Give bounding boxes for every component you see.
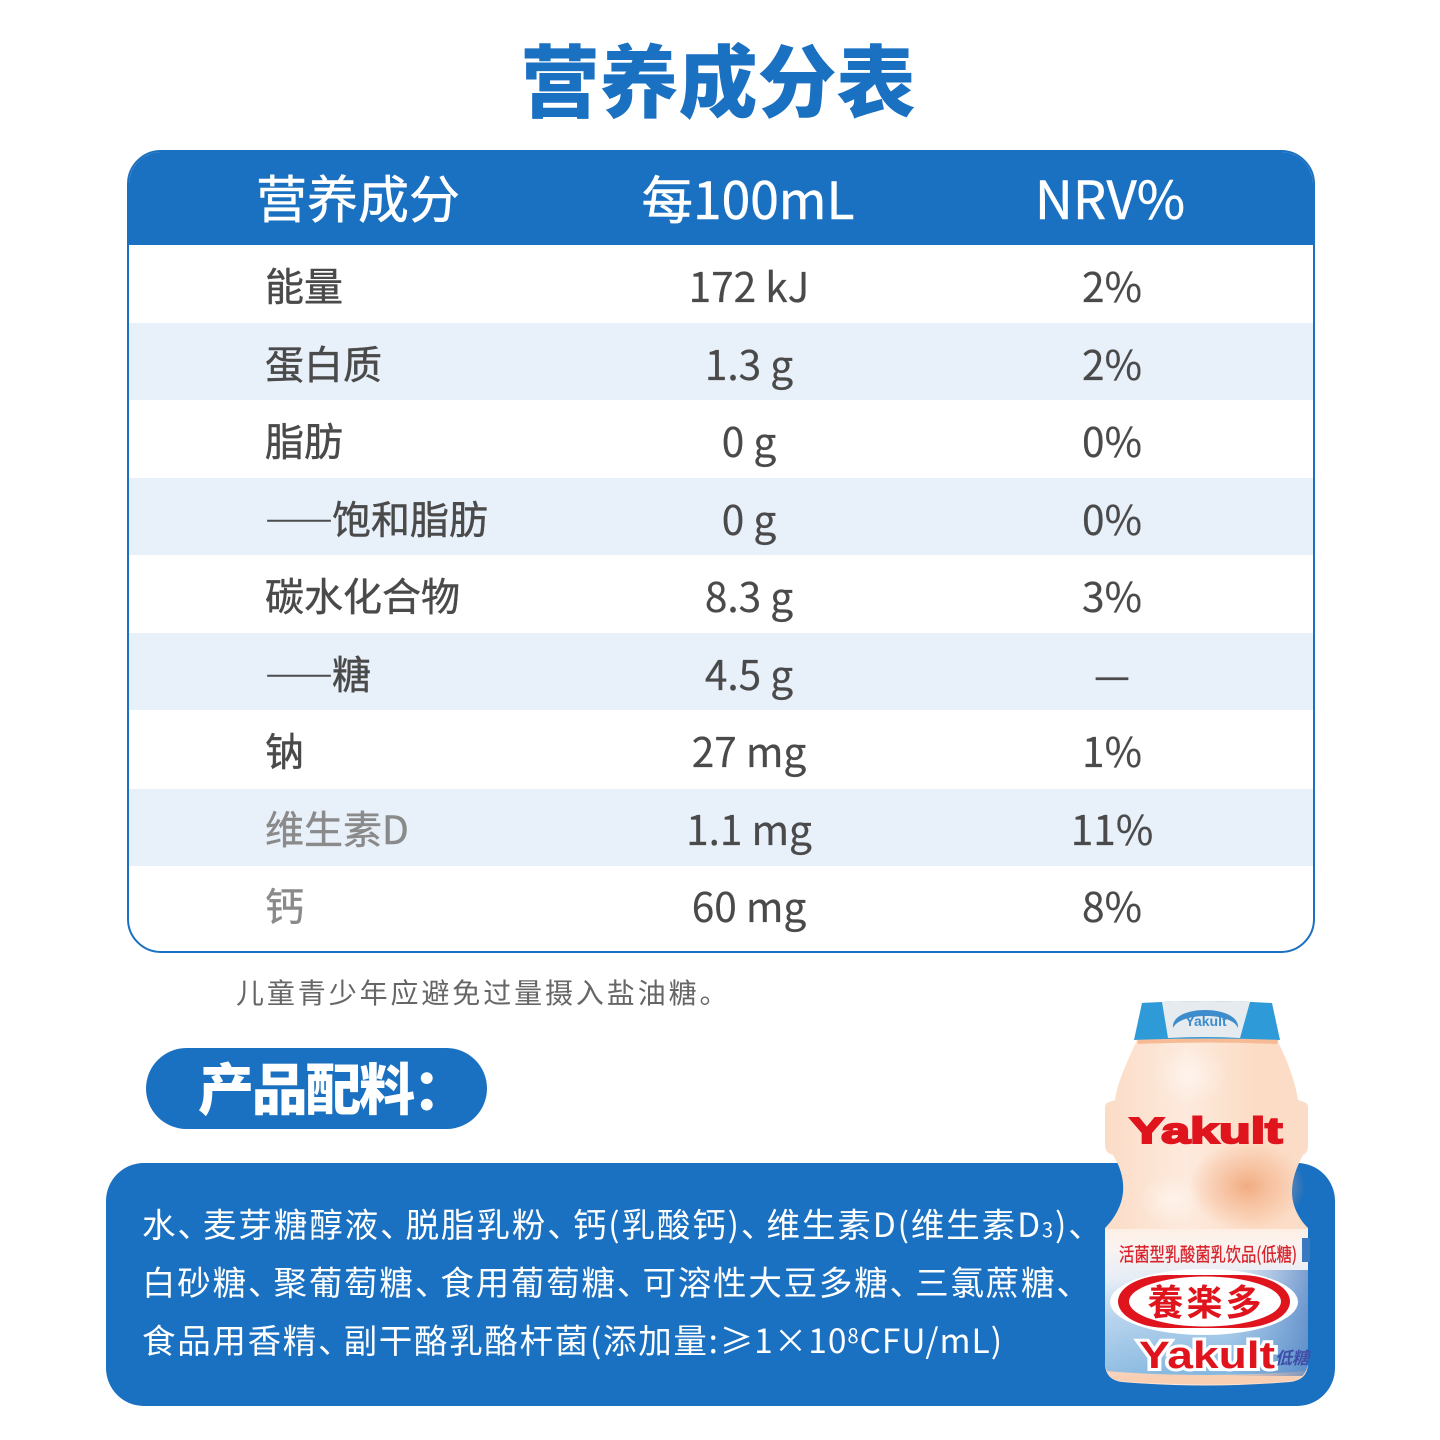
table header band bbox=[127, 150, 1315, 245]
bottle body bbox=[1105, 1040, 1308, 1386]
label panel bbox=[1105, 1226, 1308, 1388]
value: fat: 0 g bbox=[722, 410, 776, 469]
value: vitamin D: 1.1 mg bbox=[686, 798, 812, 857]
value: calcium: 60 mg bbox=[692, 875, 806, 934]
ingredients line 1: 水、麦芽糖醇液、脱脂乳粉、钙(乳酸钙)、维生素D(维生素D3)、 bbox=[142, 1198, 1094, 1247]
nrv: energy: 2% bbox=[1082, 255, 1142, 314]
nrv: carbohydrate: 3% bbox=[1082, 565, 1142, 624]
row: sugar: ——糖 bbox=[265, 645, 371, 701]
nrv: calcium: 8% bbox=[1082, 875, 1142, 934]
ingredients line 3: 食品用香精、副干酪乳酪杆菌(添加量:≥1×108CFU/mL) bbox=[142, 1314, 1003, 1363]
alternating row shading: sugar bbox=[129, 633, 1313, 710]
nrv: fat: 0% bbox=[1082, 410, 1142, 469]
alternating row shading: vitamin D bbox=[129, 789, 1313, 866]
value: saturated fat: 0 g bbox=[722, 488, 776, 547]
upper Yakult logo: Yakult bbox=[1130, 1110, 1282, 1151]
lower Yakult logo: Yakult bbox=[1139, 1335, 1275, 1377]
cap logo text: Yakult bbox=[1185, 1013, 1227, 1029]
value: sodium: 27 mg bbox=[692, 720, 806, 779]
nrv: saturated fat: 0% bbox=[1082, 488, 1142, 547]
alternating row shading: saturated fat bbox=[129, 478, 1313, 555]
red oval logo bbox=[1118, 1275, 1290, 1328]
heading text: 产品配料： bbox=[198, 1046, 467, 1127]
ingredients line 2: 白砂糖、聚葡萄糖、食用葡萄糖、可溶性大豆多糖、三氯蔗糖、 bbox=[142, 1256, 1082, 1305]
value: carbohydrate: 8.3 g bbox=[705, 565, 793, 624]
row: carbohydrate: 碳水化合物 bbox=[265, 567, 460, 623]
row: calcium: 钙 bbox=[265, 877, 304, 933]
oval logo text: 養楽多 bbox=[1147, 1274, 1265, 1326]
nrv: protein: 2% bbox=[1082, 333, 1142, 392]
icon: Yakult bottle bbox=[1105, 1001, 1312, 1386]
row: energy: 能量 bbox=[265, 257, 343, 313]
nrv: sodium: 1% bbox=[1082, 720, 1142, 779]
oval inner bbox=[1129, 1276, 1281, 1326]
low sugar mark: 低糖 bbox=[1275, 1344, 1312, 1369]
bottle highlight: waist bbox=[1138, 1174, 1202, 1226]
row: saturated fat: ——饱和脂肪 bbox=[265, 490, 488, 546]
value: protein: 1.3 g bbox=[705, 333, 793, 392]
label caption: 活菌型乳酸菌乳饮品(低糖) bbox=[1119, 1240, 1297, 1267]
panel: nutrition table bbox=[127, 150, 1315, 953]
small side badge bbox=[1302, 1238, 1310, 1262]
panel: ingredients bbox=[106, 1163, 1335, 1406]
cap: shadow strip bbox=[1137, 1036, 1279, 1044]
oval halo bbox=[1110, 1269, 1298, 1335]
row: fat: 脂肪 bbox=[265, 412, 343, 468]
label side tone bbox=[1105, 1270, 1308, 1376]
nrv: vitamin D: 11% bbox=[1071, 798, 1153, 857]
cap: blue foil bbox=[1134, 1001, 1280, 1040]
label gradient bbox=[1105, 1226, 1308, 1375]
table header: nutrient: 营养成分 bbox=[256, 159, 460, 233]
value: sugar: 4.5 g bbox=[705, 643, 793, 702]
cap: silver centre bbox=[1162, 1001, 1250, 1038]
bottle shading bbox=[1189, 1142, 1305, 1230]
cap logo arch bbox=[1173, 1010, 1238, 1028]
value: energy: 172 kJ bbox=[689, 255, 809, 314]
table header: per 100mL: 每100mL bbox=[642, 159, 854, 234]
alternating row shading: protein bbox=[129, 323, 1313, 400]
row: protein: 蛋白质 bbox=[265, 335, 382, 391]
table header: NRV: NRV% bbox=[1035, 159, 1185, 235]
nrv: sugar: — bbox=[1094, 643, 1130, 702]
bottle highlight: shoulder bbox=[1152, 1045, 1228, 1105]
heading pill: ingredients bbox=[146, 1048, 487, 1129]
title: 营养成分表 bbox=[520, 19, 916, 134]
label peach base bbox=[1107, 1371, 1302, 1384]
row: sodium: 钠 bbox=[265, 722, 304, 778]
footnote: 儿童青少年应避免过量摄入盐油糖。 bbox=[236, 972, 730, 1012]
row: vitamin D: 维生素D bbox=[265, 800, 409, 856]
